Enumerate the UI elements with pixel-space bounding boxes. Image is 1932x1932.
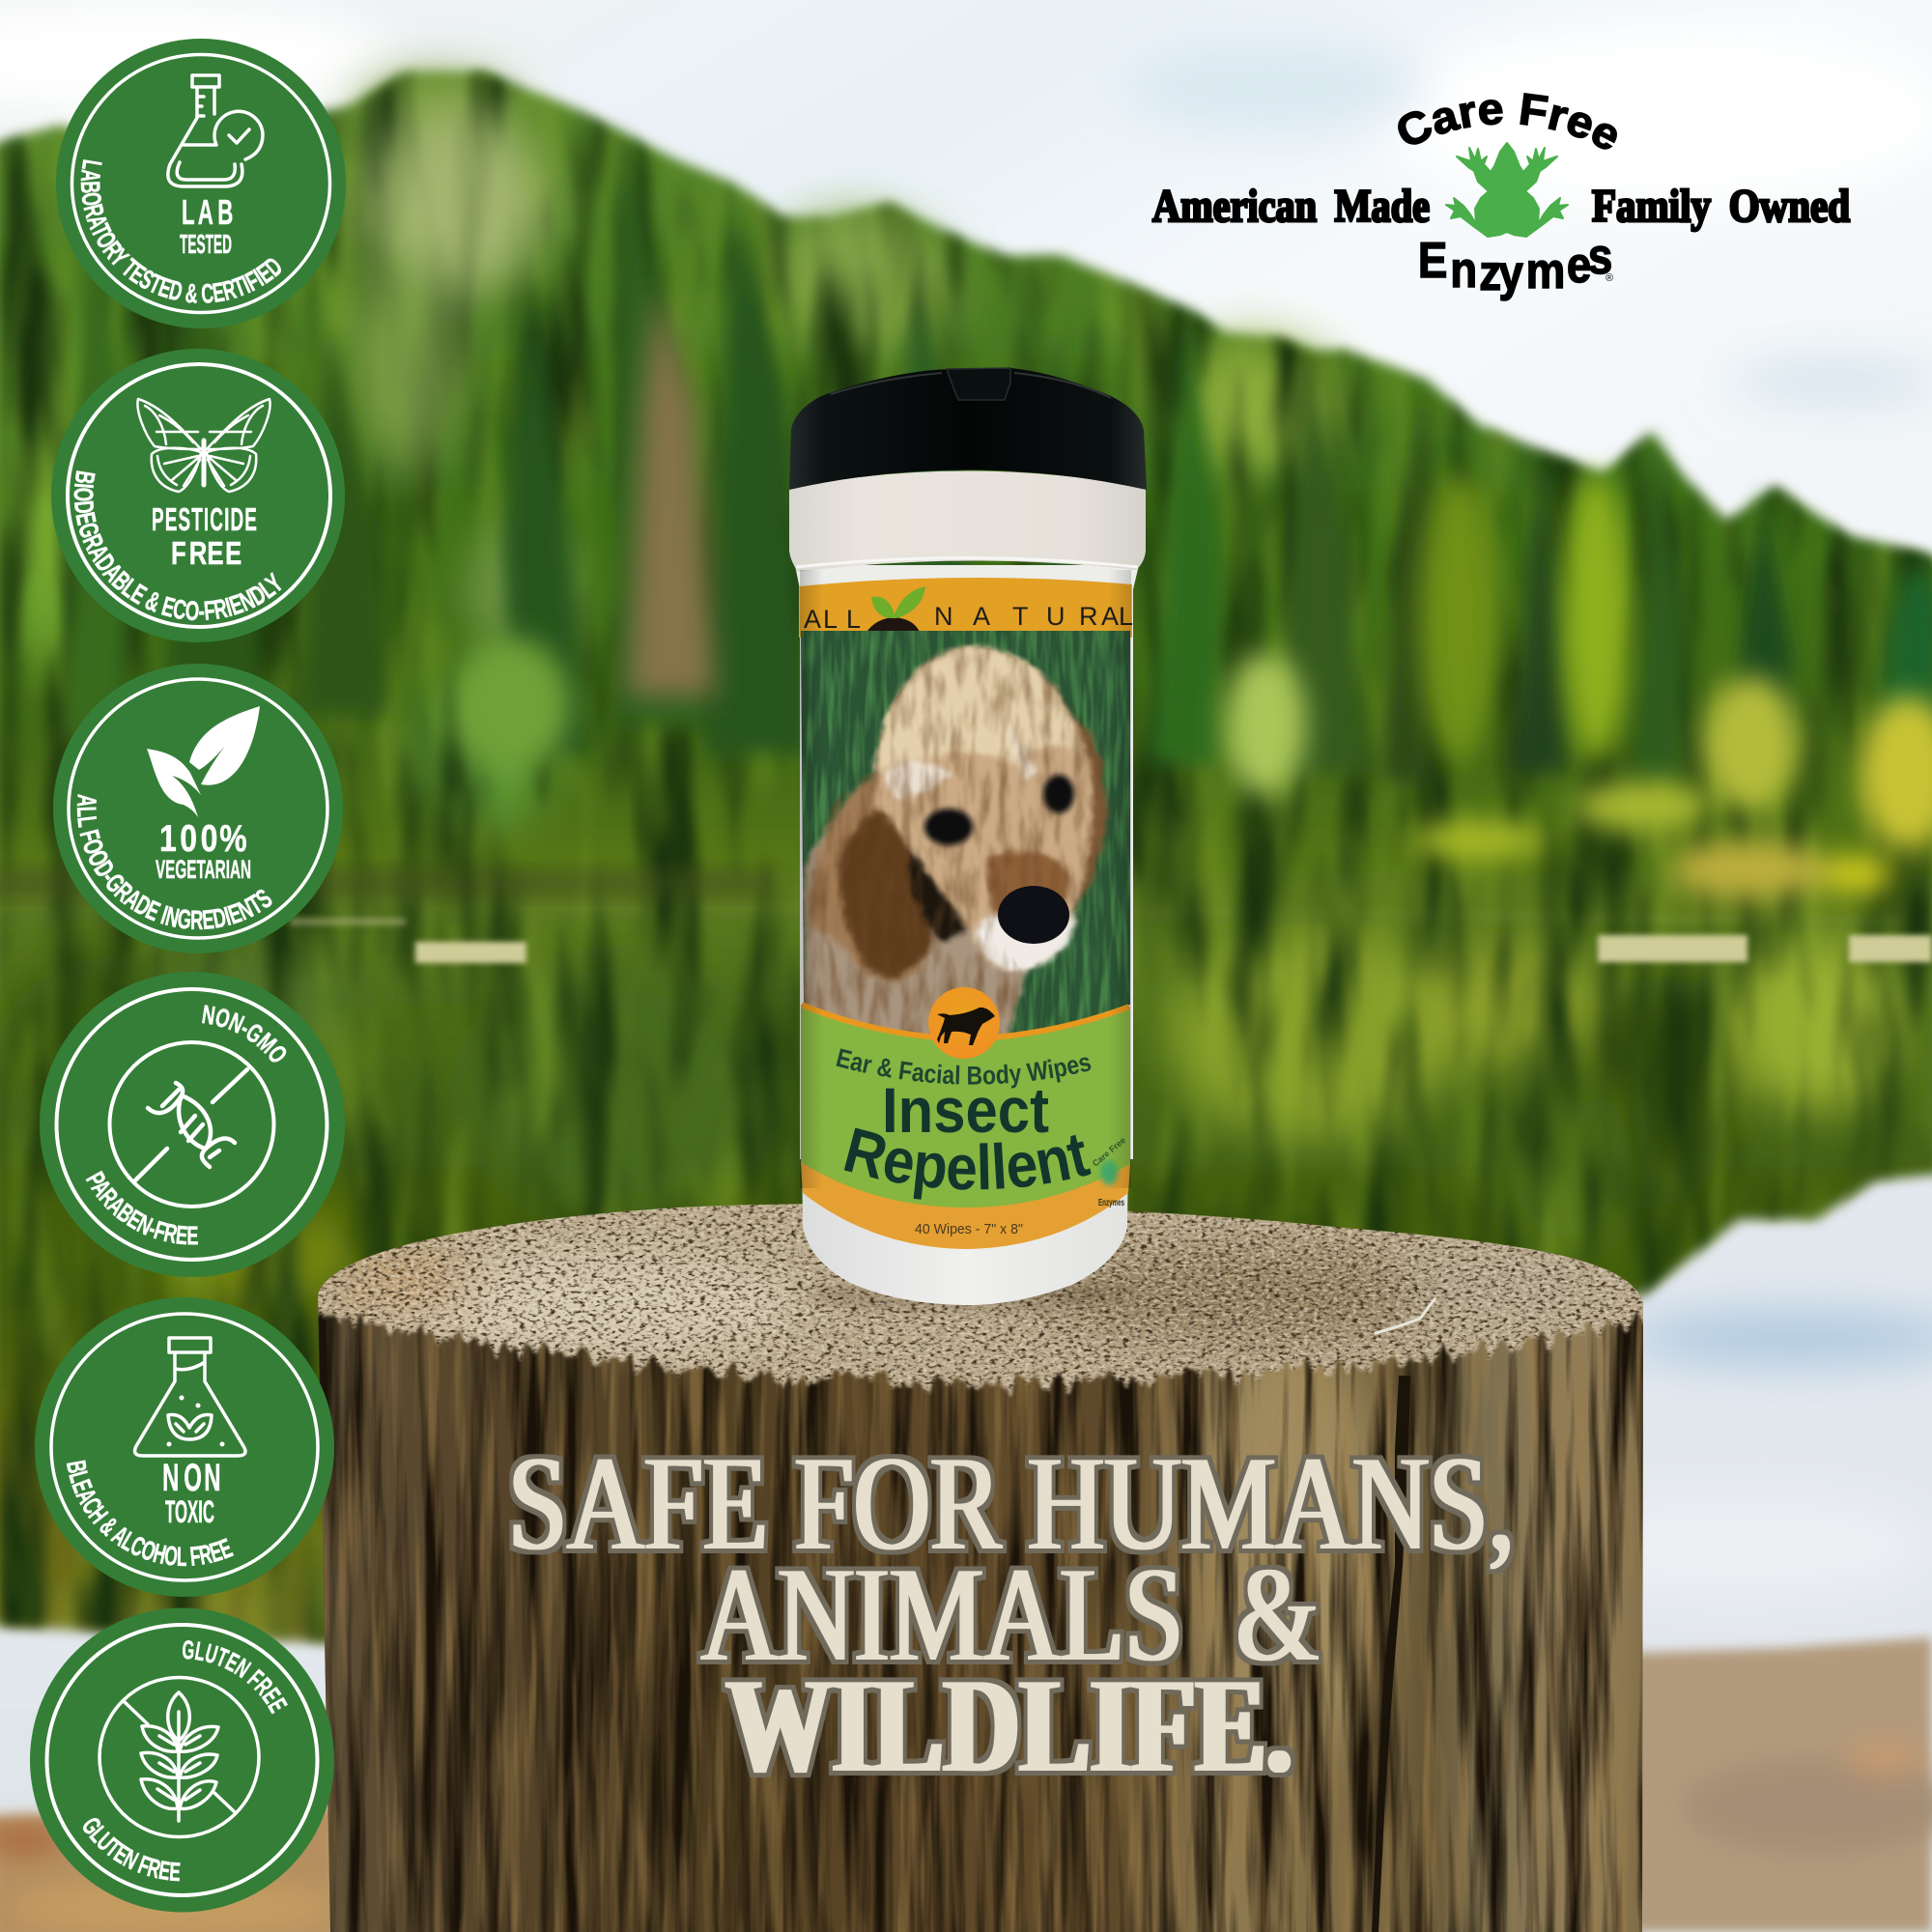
lid flap [947, 368, 1010, 400]
mini frog [1100, 1160, 1118, 1185]
shore shadow band [0, 869, 773, 898]
dog [804, 647, 1107, 1053]
flask outline [168, 75, 242, 186]
ground tones [0, 1741, 1932, 1932]
VEGETARIAN: VEGETARIAN [156, 855, 251, 884]
dog silhouette [937, 1008, 995, 1045]
circle [928, 987, 1000, 1059]
orange dog circle [928, 987, 1000, 1059]
icon: leaves [147, 706, 260, 817]
enzymes: Enzymes [1418, 229, 1612, 301]
bottom arc: GLUTEN FREE [76, 1812, 182, 1887]
outer ring [56, 989, 327, 1260]
label text: all natural [804, 586, 1133, 634]
pale water streaks [290, 918, 1932, 963]
forest colour patches [5, 77, 1343, 831]
label: ear and facial body wipes: Ear & Facial Body Wipes [837, 1048, 1092, 1088]
dog right eye [1043, 775, 1074, 813]
icon: wheat crossed [124, 1692, 234, 1821]
collar [789, 471, 1146, 572]
sunlit patch [1021, 1360, 1395, 1759]
dog left ear outer [807, 772, 932, 980]
NATURAL: NATURAL [934, 602, 1133, 631]
arc text: BIODEGRADABLE & ECO-FRIENDLY [69, 469, 289, 626]
ring [71, 54, 330, 313]
dog head [874, 647, 1093, 971]
badge: non toxic [35, 1297, 334, 1597]
dog muzzle [974, 913, 1074, 972]
dog body [804, 802, 1048, 1053]
slash [124, 1701, 234, 1811]
icon: flask with leaf [135, 1338, 245, 1456]
icon: flask with check [168, 75, 263, 186]
reddish dead tree [628, 290, 715, 696]
water with tree reflection [0, 889, 1932, 1642]
TOXIC: TOXIC [165, 1494, 214, 1529]
helix [148, 1083, 235, 1167]
dog head fluff [874, 647, 1087, 773]
mini enzymes: Enzymes [1098, 1198, 1124, 1208]
badge: vegetarian [53, 664, 343, 953]
small leaf [147, 749, 201, 817]
canister bottom [802, 1150, 1128, 1305]
top light speckle [270, 1140, 1690, 1449]
sprout leaves [871, 586, 925, 618]
NON: NON [162, 1456, 221, 1498]
label lower orange band [801, 1162, 1130, 1249]
flask [135, 1338, 245, 1456]
tree stump [318, 1204, 1643, 1932]
body [201, 440, 207, 485]
ring [69, 679, 327, 938]
check circle [214, 111, 263, 159]
label photo: dog on grass [797, 628, 1135, 1053]
stump top surface [270, 1140, 1690, 1449]
arc text: LABORATORY TESTED & CERTIFIED [81, 159, 281, 303]
PESTICIDE: PESTICIDE [152, 501, 258, 537]
slash [135, 1069, 247, 1180]
bubbles [166, 1395, 224, 1447]
label: repellent: Repellent [844, 1128, 1092, 1200]
ring [51, 1314, 318, 1580]
top dark speckle [270, 1140, 1690, 1449]
soft shadow [807, 1277, 1125, 1312]
icon: dna crossed [135, 1069, 247, 1180]
dog left eye [924, 809, 973, 845]
badge: non-gmo paraben-free [40, 972, 345, 1277]
grass [797, 628, 1135, 1043]
left wings [137, 399, 201, 492]
registered mark: ® [1605, 272, 1613, 284]
disc [40, 972, 345, 1277]
ALL: ALL [804, 605, 861, 634]
care free: Care Free [1398, 93, 1617, 150]
dog snout brown [985, 851, 1068, 918]
big leaf [189, 706, 260, 785]
FREE: FREE [171, 536, 242, 572]
ring [68, 364, 330, 627]
badge: lab tested [56, 39, 346, 328]
label top band [799, 578, 1132, 638]
collar ridge [796, 558, 1138, 567]
inner ring [110, 1042, 274, 1207]
100%: 100% [159, 817, 247, 860]
american made: American Made [1152, 181, 1430, 232]
headline [508, 1429, 1515, 1801]
top tones [328, 1246, 1613, 1352]
NON-GMO: NON-GMO [200, 1000, 293, 1069]
orange curve [802, 1005, 1129, 1039]
dog nose [998, 886, 1069, 944]
top leaf [168, 1692, 189, 1741]
bright trees and shrubs at shore [454, 473, 1932, 898]
body [795, 565, 1139, 1159]
wood chip [1376, 1299, 1435, 1333]
dark conifer bands [68, 126, 1932, 782]
top base [270, 1140, 1690, 1449]
cylinder shading [800, 570, 1131, 1188]
badge: lab tested: TESTED [180, 229, 232, 259]
LAB: LAB [182, 194, 233, 232]
leaf pairs [141, 1726, 218, 1808]
badge: gluten free [30, 1607, 334, 1913]
dog left ear dark [838, 802, 932, 977]
arc text: ALL FOOD-GRADE INGREDIENTS [71, 793, 277, 935]
sky [0, 0, 1932, 676]
right wings [207, 399, 270, 492]
inner ring [99, 1677, 259, 1837]
disc [30, 1607, 334, 1913]
label: count: 40 Wipes - 7" x 8" [915, 1221, 1023, 1237]
icon: butterfly [137, 399, 270, 492]
brand logo [1152, 83, 1850, 301]
label mini logo [1091, 1135, 1127, 1208]
dog neck shadow [908, 831, 974, 942]
label: insect: Insect [882, 1074, 1049, 1146]
crack [1372, 1376, 1410, 1932]
label green panel [801, 1005, 1130, 1209]
frog [1446, 143, 1568, 237]
badge: pesticide free [51, 349, 345, 642]
grass blades [797, 628, 1135, 1043]
arc text: BLEACH & ALCOHOL FREE [61, 1458, 237, 1572]
clouds [0, 0, 1932, 397]
disc [35, 1297, 334, 1597]
mini care free: Care Free [1091, 1135, 1127, 1169]
stem [177, 1712, 181, 1821]
line 2: ANIMALS & [701, 1540, 1319, 1690]
soil mound [867, 617, 920, 632]
stump side [309, 1256, 1652, 1932]
light hillside canopy [348, 106, 918, 657]
top arc: GLUTEN FREE [182, 1635, 293, 1718]
line 3: WILDLIFE. [726, 1651, 1293, 1801]
disc [51, 349, 345, 642]
outer ring [46, 1625, 317, 1895]
family owned: Family Owned [1592, 181, 1850, 232]
stump dark grain [309, 1256, 1652, 1932]
disc [53, 664, 343, 953]
lid [789, 368, 1147, 490]
disc [56, 39, 346, 328]
reflection tones [0, 927, 1903, 1584]
stump light grain [309, 1256, 1652, 1932]
lid highlights [831, 373, 1111, 398]
dog right ear [1057, 715, 1107, 903]
ground [0, 1637, 1932, 1932]
leaves [168, 1415, 212, 1439]
far lake: sky reflection [0, 1111, 1932, 1710]
dog brow stripes [884, 720, 1038, 798]
PARABEN-FREE: PARABEN-FREE [80, 1167, 198, 1250]
fur texture [802, 638, 1111, 1043]
line 1: SAFE FOR HUMANS, [508, 1429, 1515, 1578]
product: wipes canister [789, 368, 1147, 1312]
sky reflection tint [1546, 1313, 1932, 1594]
forest mass [0, 72, 1932, 927]
